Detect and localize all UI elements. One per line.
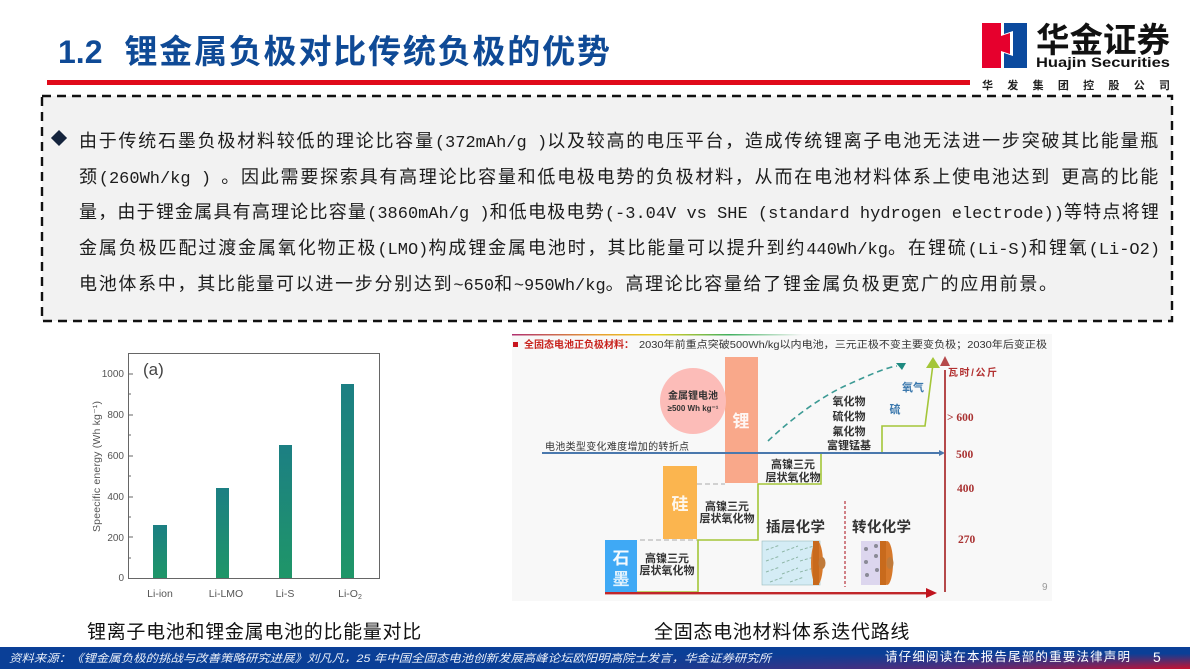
roadmap diagram: 400 [957,483,974,495]
bar chart: specific energy: 0 [118,573,124,584]
caption: left chart: 锂离子电池和锂金属电池的比能量对比 [87,622,422,643]
paragraph text: 电池体系中，其比能量可以进一步分别达到~650和~950Wh/kg。高理论比容量给了锂金属负极更宽广的应用前景。 [79,276,1059,296]
labels: 富锂锰基 [827,438,871,452]
footer bar: 请仔细阅读在本报告尾部的重要法律声明 [885,649,1130,664]
roadmap diagram: 硫 [890,402,900,416]
labels: 氧化物 [832,394,866,408]
labels [640,394,871,577]
footer bar: 5 [1153,649,1161,665]
roadmap diagram: 氧气 [902,380,924,394]
roadmap diagram: 石 [612,549,630,568]
roadmap diagram: 瓦时/公斤 [948,366,997,379]
caption: right diagram: 全固态电池材料体系迭代路线 [654,622,910,643]
roadmap diagram: 锂 [732,412,750,431]
blue line [542,452,942,454]
labels: 硫化物 [832,409,866,423]
roadmap diagram: 全固态电池正负极材料： [524,338,634,351]
bar chart: specific energy: 400 [107,492,124,503]
roadmap diagram: 墨 [612,570,630,589]
dashed ties [640,484,725,540]
labels: 高镍三元 [771,457,815,471]
labels: 高镍三元 [645,551,689,565]
bar chart: specific energy: 200 [107,533,124,544]
paragraph text: 颈(260Wh/kg ) 。因此需要探索具有高理论比容量和低电极电势的负极材料，从而在电池材料体系上使电池达到 更高的比能 [79,169,1160,189]
icon: diamond bullet [51,130,67,146]
labels: 层状氧化物 [640,563,694,577]
roadmap diagram [512,334,1048,598]
paragraph text: 金属负极匹配过渡金属氧化物正极(LMO)构成锂金属电池时，其比能量可以提升到约440Wh/kg。在锂硫(Li-S)和锂氧(Li-O2) [79,240,1160,260]
labels: 层状氧化物 [700,511,754,525]
bar chart: specific energy: Li-O [338,588,358,600]
bar chart: specific energy: Li-S [276,588,294,600]
logo: 华金证券 [1036,22,1170,60]
bar chart: specific energy: Speecific energy (Wh kg⁻¹) [91,401,103,532]
paragraph text: 由于传统石墨负极材料较低的理论比容量(372mAh/g )以及较高的电压平台，造成传统锂离子电池无法进一步突破其比能量瓶 [79,133,1160,153]
roadmap diagram: ≥500 Wh kg⁻¹ [668,404,719,413]
roadmap diagram: 9 [1042,582,1048,593]
logo: 华发集团控股公司 [982,78,1170,92]
roadmap diagram: 500 [956,449,974,461]
logo [982,22,1170,92]
bar chart: specific energy [91,353,380,601]
title rule [47,80,970,85]
roadmap diagram: > 600 [947,412,974,424]
roadmap diagram: 插层化学 [766,518,825,536]
bar chart: specific energy: 600 [107,451,124,462]
teal dashed curve [768,366,897,441]
green steps [637,364,933,592]
bars [725,357,758,483]
bar chart: specific energy: Li-ion [147,588,173,600]
roadmap diagram: 270 [958,534,976,546]
paragraph text: 量，由于锂金属具有高理论比容量(3860mAh/g )和低电极电势(-3.04V vs SHE (standard hydrogen electrode))等特点将锂 [79,204,1160,224]
bar chart: specific energy: Li-LMO [209,588,243,600]
roadmap diagram: 转化化学 [852,518,911,536]
source note: 资料来源：《锂金属负极的挑战与改善策略研究进展》刘凡凡，25 年中国全固态电池创新发展高峰论坛欧阳明高院士发言，华金证券研究所 [9,652,773,665]
cylinders [762,541,820,585]
bar chart: specific energy: 2 [358,594,362,601]
panel: text box [40,94,1174,322]
bar chart: specific energy: 1000 [102,369,124,380]
roadmap diagram: 硅 [672,495,688,514]
labels: 氟化物 [832,424,866,438]
bar chart: specific energy: 800 [107,410,124,421]
title: 1.2 锂金属负极对比传统负极的优势 [58,33,612,70]
paragraph text [79,131,1160,296]
footer bar [0,647,1190,669]
red axes [605,592,927,594]
roadmap diagram: 电池类型变化难度增加的转折点 [545,440,689,453]
bar chart: specific energy: (a) [143,360,164,379]
roadmap diagram: 金属锂电池 [668,389,718,402]
labels: 高镍三元 [705,499,749,513]
labels: 层状氧化物 [766,470,820,484]
logo: Huajin Securities [1036,55,1170,70]
roadmap diagram: 2030年前重点突破500Wh/kg以内电池，三元正极不变主要变负极；2030年后变正极 [639,338,1047,351]
